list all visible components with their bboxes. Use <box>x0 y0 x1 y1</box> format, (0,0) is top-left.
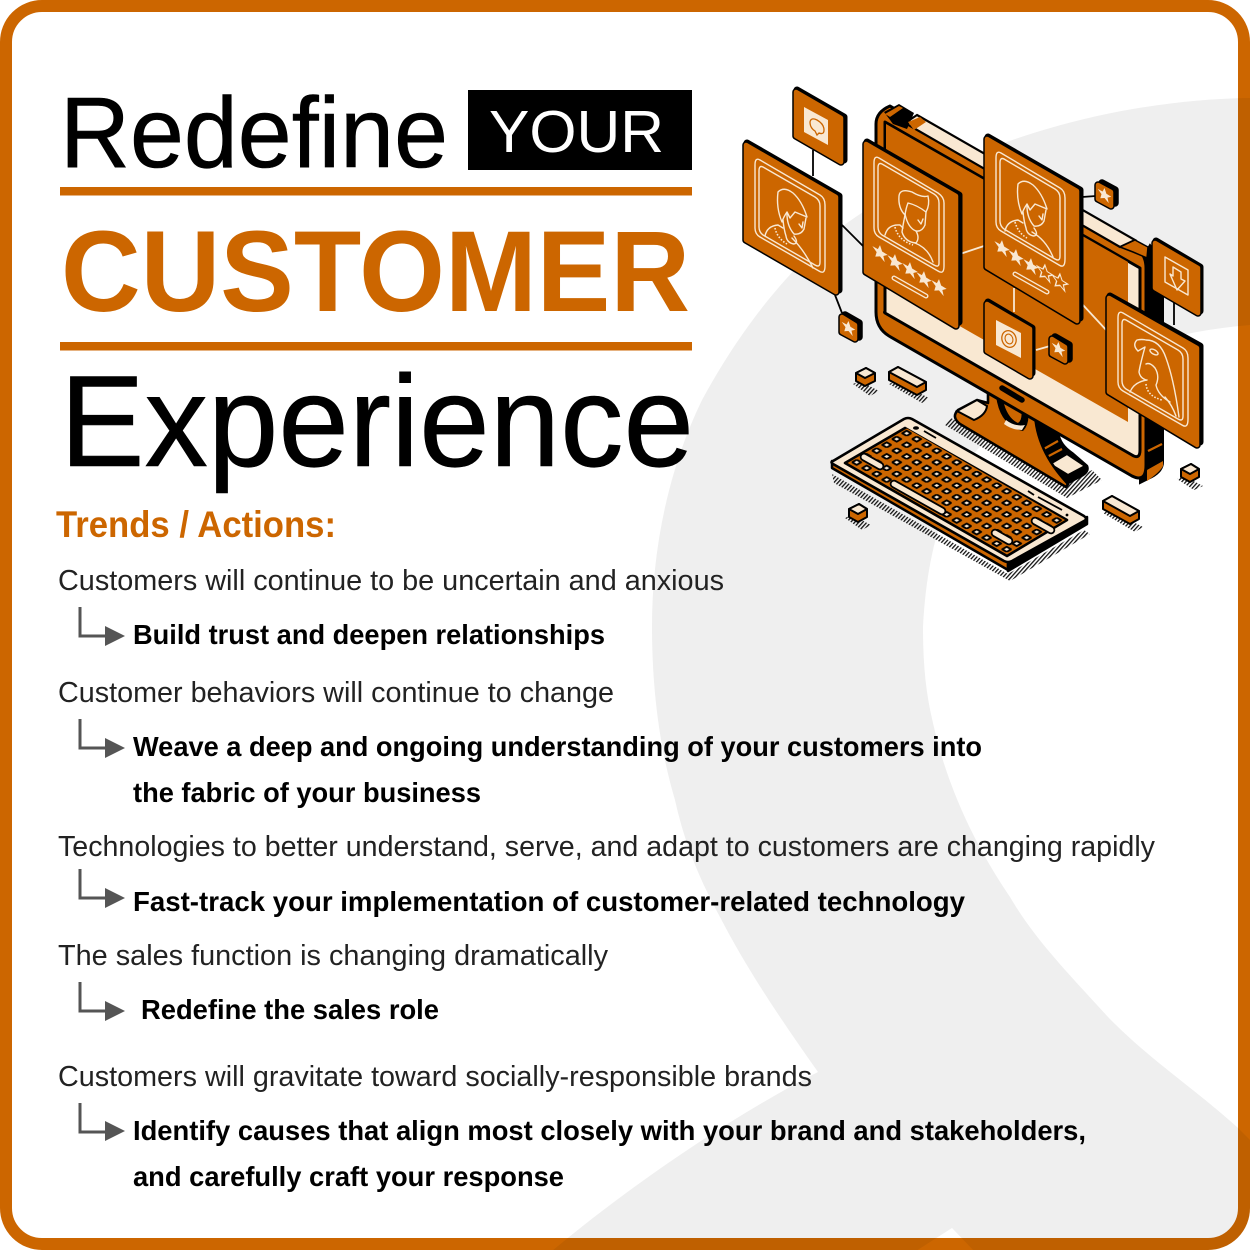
trend 4 statement: The sales function is changing dramatically <box>58 940 609 972</box>
keyboard shadow <box>832 474 1090 581</box>
card: download icon <box>1155 241 1200 313</box>
keyboard base <box>832 418 1087 571</box>
card: customer profile left <box>746 143 839 292</box>
portrait: customer <box>1130 340 1179 417</box>
monitor <box>876 104 1163 483</box>
arrow 2 <box>80 719 125 758</box>
card: customer profile right <box>1109 296 1200 445</box>
card: customer profile five stars <box>866 142 959 326</box>
portrait frame <box>755 159 825 272</box>
monitor back side <box>1140 245 1163 483</box>
card: clock icon <box>987 302 1032 376</box>
trend 1 statement: Customers will continue to be uncertain and anxious <box>58 565 724 597</box>
section heading: Trends / Actions: Trends / Actions: <box>56 504 336 545</box>
top edge <box>884 104 1148 258</box>
rating: three stars filled <box>994 236 1039 277</box>
block: bar 2 <box>1103 496 1139 524</box>
title word: Experience: Experience <box>60 348 694 494</box>
trend 5 action <box>133 1115 1086 1192</box>
long keys <box>864 457 1051 541</box>
small blocks <box>849 367 1199 524</box>
trend 1 <box>58 565 724 650</box>
rating bar <box>894 278 926 296</box>
portrait: customer <box>1005 181 1053 257</box>
block: small cube 2 <box>1181 464 1199 482</box>
key grid <box>849 428 1065 554</box>
key well <box>845 428 1067 556</box>
trend 3 statement: Technologies to better understand, serve, and adapt to customers are changing rapidly <box>58 831 1156 863</box>
small block shadows <box>845 381 1203 532</box>
tile: star left <box>842 315 859 339</box>
title rule top <box>60 187 692 196</box>
icon: download arrow <box>1165 257 1188 295</box>
trend 2 action: the fabric of your business <box>133 777 481 808</box>
arrow 5 <box>80 1103 125 1141</box>
screen <box>884 122 1140 457</box>
trend 2 action: Weave a deep and ongoing understanding of your customers into <box>133 731 982 762</box>
block: bar 1 <box>889 367 926 395</box>
block: small cube 1 <box>856 368 875 386</box>
icon: clock <box>996 320 1021 358</box>
trend 4 <box>58 940 609 1025</box>
card: customer profile three stars <box>987 137 1080 321</box>
title word: CUSTOMER: CUSTOMER <box>61 208 690 336</box>
arrow 3 <box>80 869 125 908</box>
portrait frame <box>996 152 1065 266</box>
portrait frame <box>1118 312 1188 426</box>
portrait frame <box>874 157 944 272</box>
rating: two stars outline <box>1037 261 1068 293</box>
trend 2 action <box>133 731 982 808</box>
arrow 1 <box>80 607 125 646</box>
trend 5 action: Identify causes that align most closely with your brand and stakeholders, <box>133 1115 1086 1146</box>
card: chat icon <box>796 90 844 162</box>
stand shadow <box>945 418 1102 498</box>
trend 5 statement: Customers will gravitate toward socially-responsible brands <box>58 1061 812 1093</box>
portrait: customer <box>885 191 933 262</box>
trend 5 action: and carefully craft your response <box>133 1161 564 1192</box>
title word: Redefine: Redefine <box>60 77 448 189</box>
trend 3 action: Fast-track your implementation of customer-related technology <box>133 886 965 917</box>
monitor button <box>1002 388 1022 400</box>
tile: star on screen <box>1052 337 1069 361</box>
title <box>60 77 694 494</box>
title badge: YOUR: YOUR <box>489 99 664 165</box>
monitor stand <box>955 385 1088 487</box>
arrow 4 <box>80 982 125 1021</box>
trend 4 action: Redefine the sales role <box>141 994 439 1025</box>
keyboard <box>832 418 1087 571</box>
background swoosh <box>552 98 1250 1251</box>
trend 3 <box>58 831 1156 917</box>
monitor body <box>876 106 1146 478</box>
rating: five stars <box>872 241 947 298</box>
icon: chat bubble <box>804 107 828 145</box>
trend 1 action: Build trust and deepen relationships <box>133 619 605 650</box>
trend 5 <box>58 1061 1086 1192</box>
title rule bottom <box>60 342 692 350</box>
block: small cube 3 <box>849 504 867 522</box>
tile: star top right <box>1098 183 1115 206</box>
trend 2 <box>58 677 982 808</box>
connector lines <box>813 150 1174 350</box>
illustration: isometric computer with customer profile cards <box>746 90 1203 581</box>
trend 2 statement: Customer behaviors will continue to change <box>58 677 614 709</box>
portrait: customer <box>765 189 813 268</box>
title badge: YOUR <box>468 90 692 170</box>
keyboard indicator marks <box>913 426 1068 516</box>
rating bar <box>1015 274 1047 292</box>
